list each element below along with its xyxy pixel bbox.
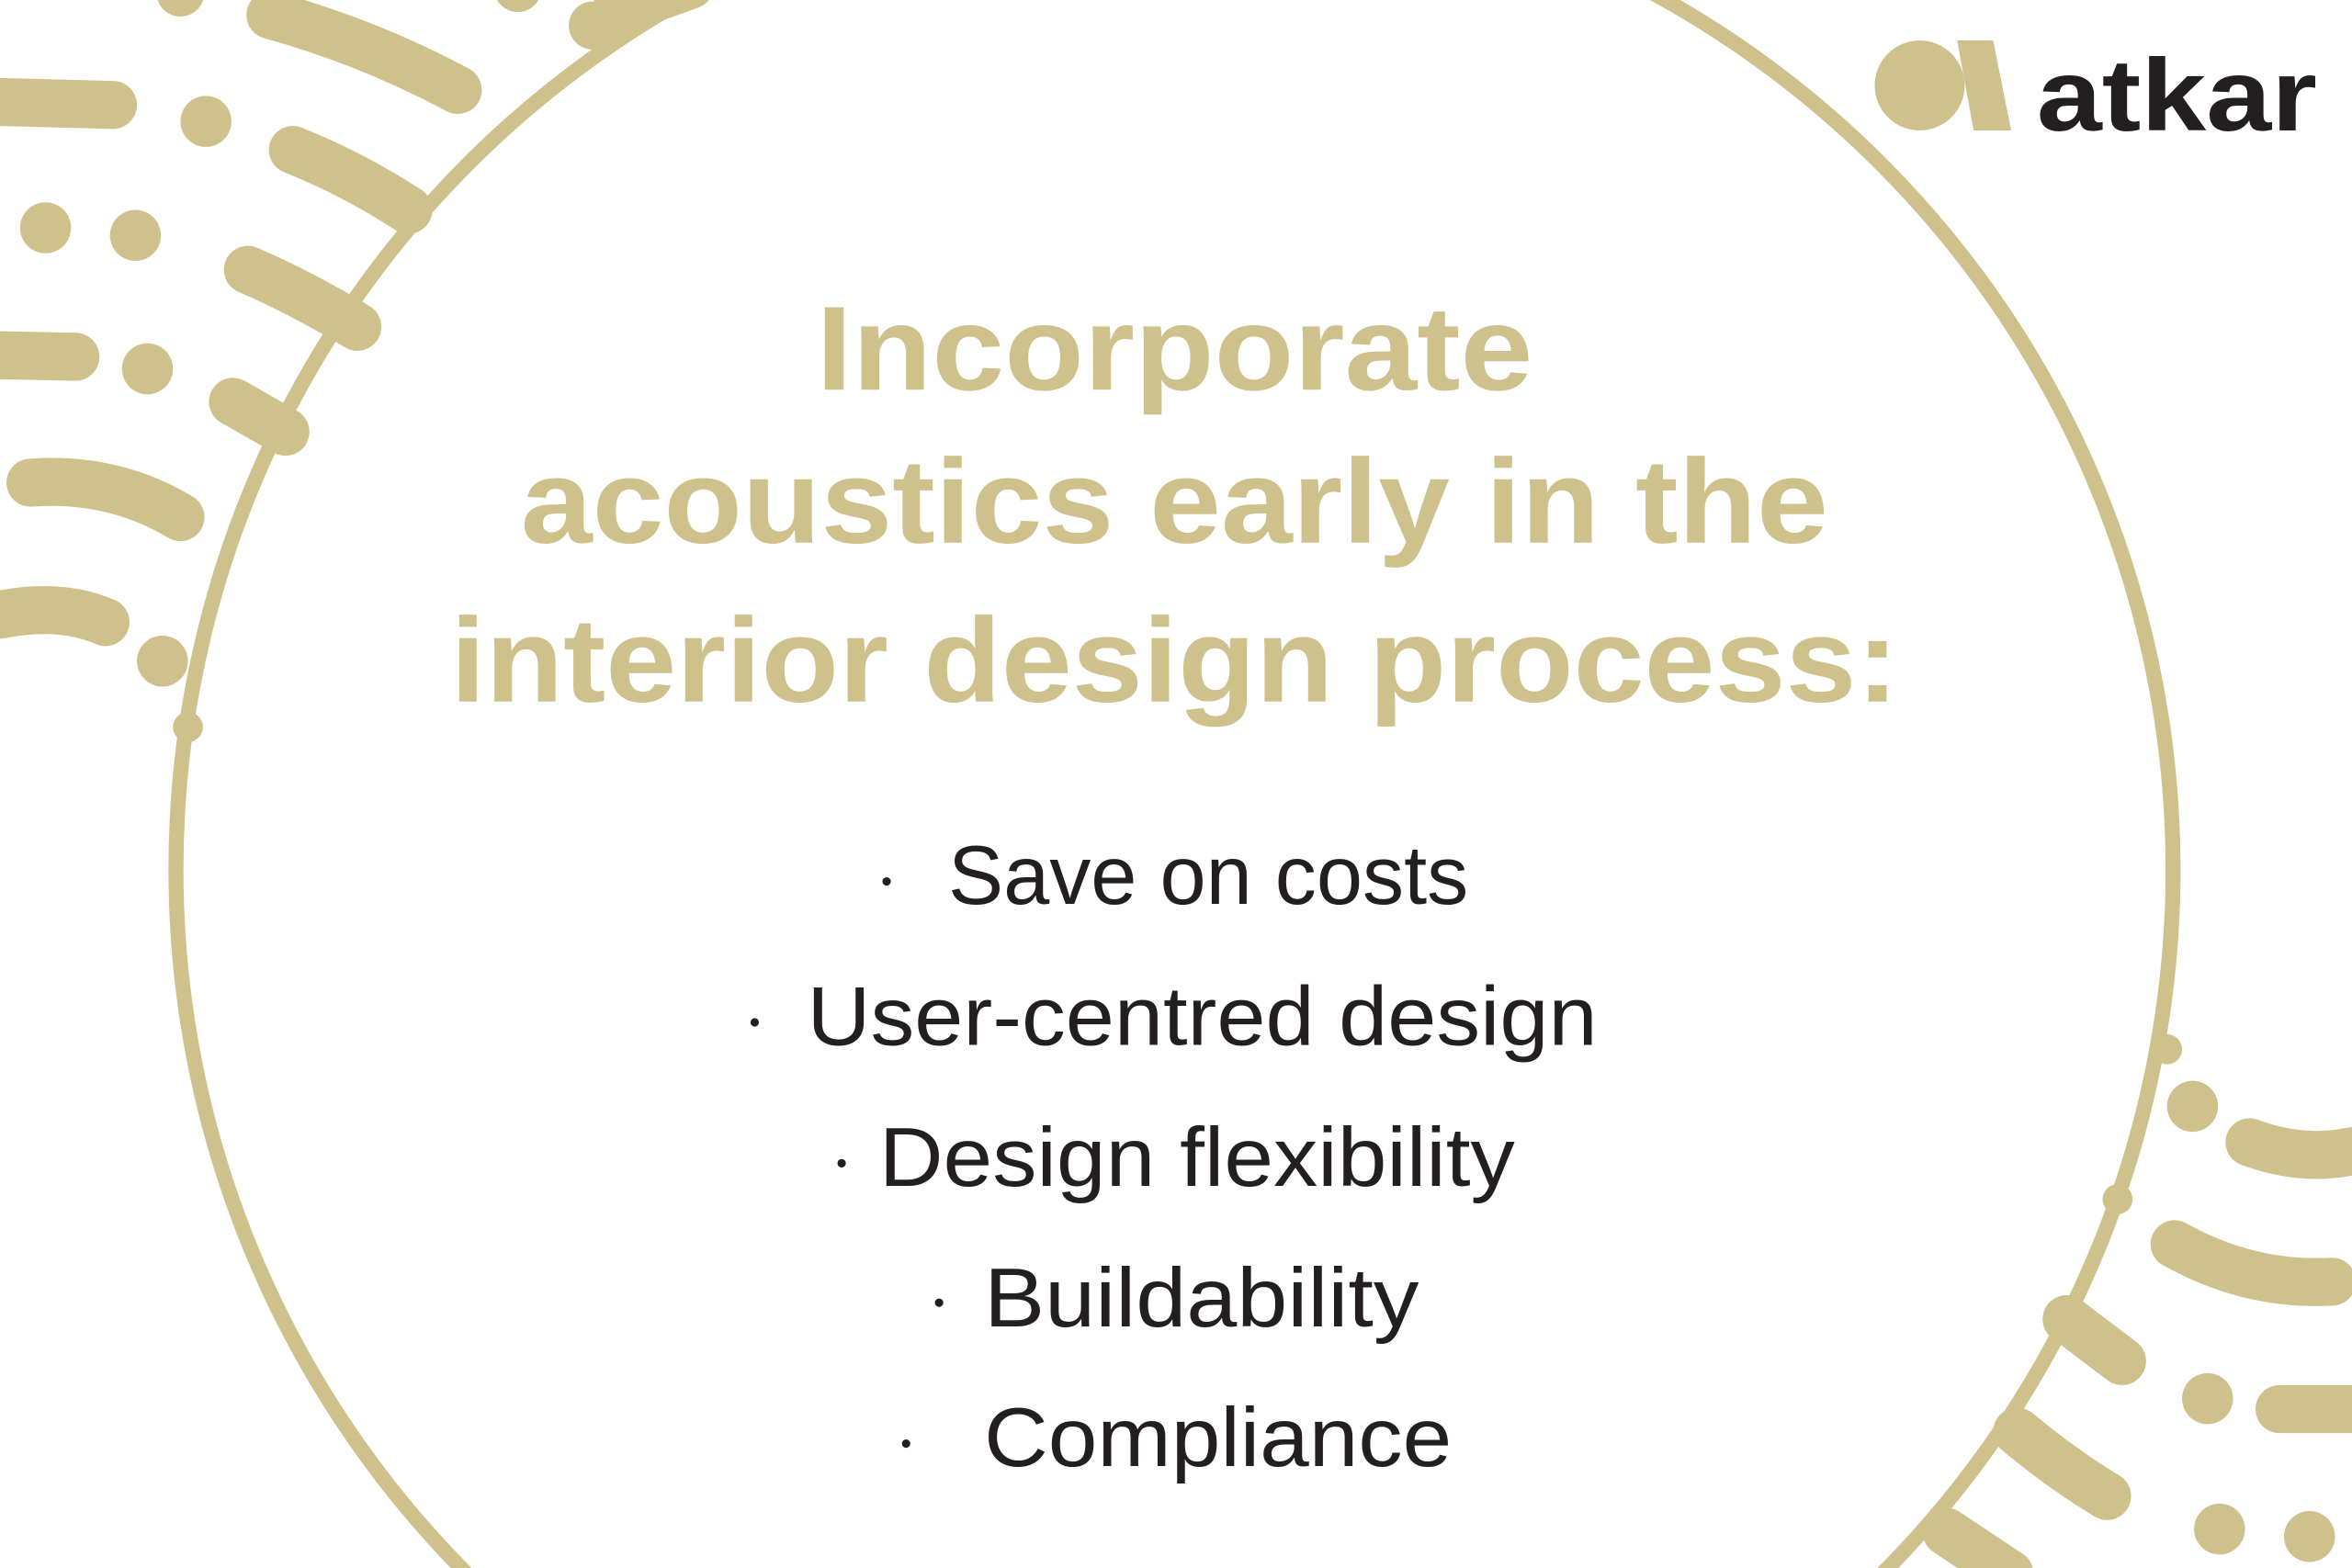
logo: atkar (2037, 39, 2317, 152)
title (450, 281, 1899, 728)
title: Incorporate (816, 281, 1532, 415)
bullet list: User-centred design (808, 969, 1598, 1063)
bullet list: Buildability (984, 1251, 1419, 1345)
bullet list: Design flexibility (879, 1111, 1515, 1204)
title: acoustics early in the (521, 434, 1828, 569)
bullet list (751, 829, 1598, 1484)
title: interior design process: (450, 593, 1899, 728)
logo (1874, 39, 2317, 152)
bullet list: Save on costs (948, 829, 1468, 922)
bullet list: Compliance (984, 1391, 1452, 1484)
